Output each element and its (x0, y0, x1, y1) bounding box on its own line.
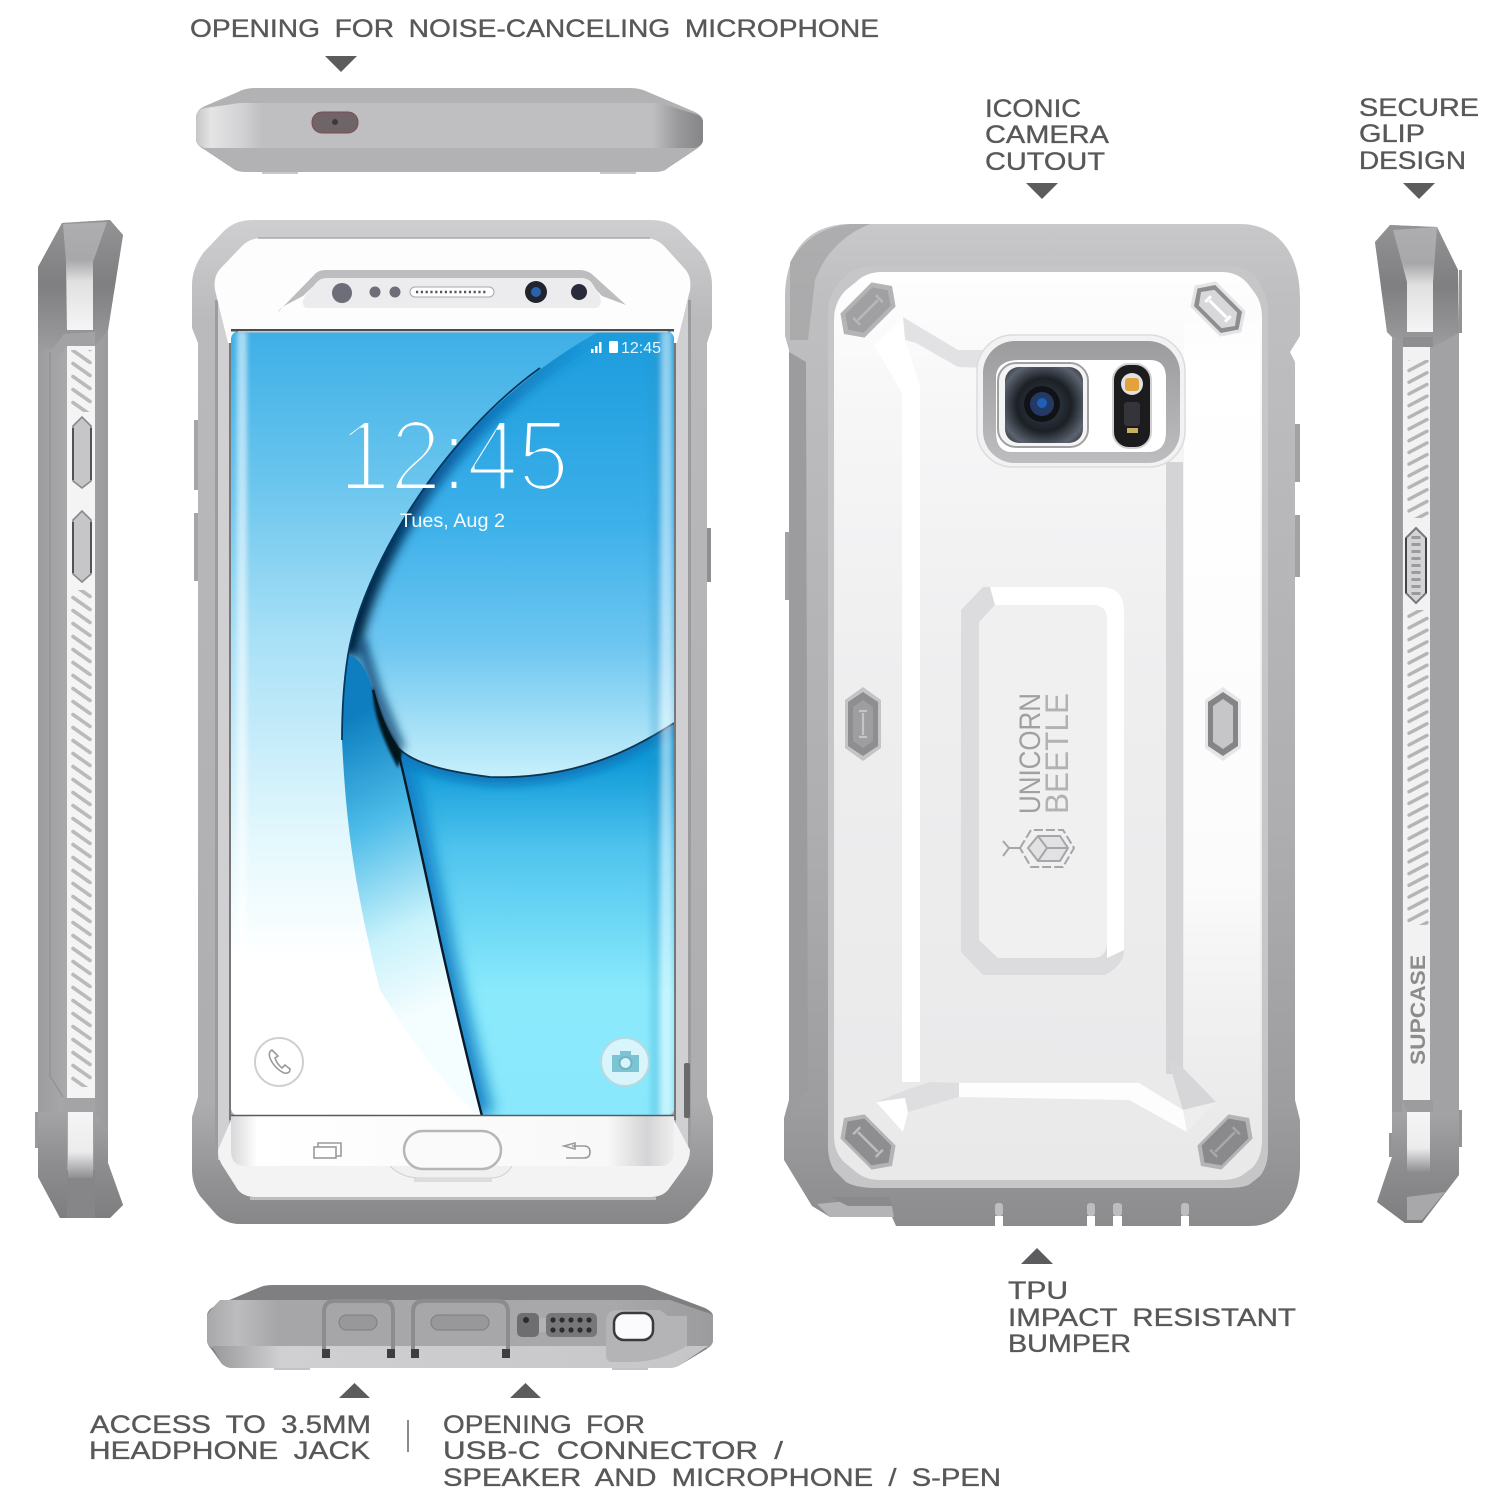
side bumps (1389, 270, 1462, 1157)
bottom edge view of case (207, 1285, 713, 1370)
head highlight (63, 222, 107, 330)
white lid top (215, 238, 690, 343)
icon: beetle logo (1003, 830, 1074, 867)
text: headphone jack label: ACCESS TO 3.5MM (90, 1411, 371, 1439)
arrow: TPU bumper (1021, 1248, 1053, 1264)
text: TPU bumper label: BUMPER (1008, 1330, 1131, 1358)
text: secure grip label (1359, 94, 1479, 175)
clock: 12:45 (339, 400, 569, 512)
hex bumper: top left (832, 274, 904, 346)
camera cutout (977, 335, 1185, 467)
right side button (706, 528, 711, 582)
grip button (1406, 528, 1426, 603)
text: TPU bumper label: IMPACT RESISTANT (1008, 1304, 1296, 1332)
arrow: headphone jack (339, 1383, 370, 1398)
arrow: camera cutout (1026, 183, 1058, 199)
screen top edge (231, 329, 674, 332)
side frame bands (215, 300, 691, 1160)
left side view of case (35, 220, 123, 1218)
wallpaper (231, 331, 674, 1116)
side body (1375, 225, 1459, 1223)
text: USB-C, speaker, S-pen label: USB-C CONNECTOR / (443, 1437, 783, 1465)
foot highlight (1407, 1112, 1430, 1172)
white grip strip (67, 346, 95, 1098)
bumper (784, 224, 1300, 1226)
curved screen edge highlights (237, 331, 672, 1116)
hex bumper: left (845, 687, 881, 761)
back key (564, 1143, 590, 1158)
stylus strap (817, 1197, 894, 1217)
ridges: frame embossing (874, 317, 1216, 1132)
text: USB-C, speaker, S-pen label: SPEAKER AND MICROPHONE / S-PEN (443, 1464, 1001, 1492)
white back panel (834, 272, 1262, 1180)
bright right column (1184, 296, 1260, 1136)
head shading (1375, 225, 1459, 347)
status bar: 12:45 (621, 340, 661, 357)
heading: noise-canceling microphone label: OPENING FOR NOISE-CANCELING MICROPHONE (190, 15, 879, 43)
icon: camera (601, 1038, 649, 1086)
arrow: USB-C opening (510, 1383, 541, 1398)
earpiece recess (278, 270, 626, 312)
back view of case (784, 224, 1300, 1227)
text: TPU bumper label: TPU (1008, 1277, 1068, 1305)
head highlight (1393, 227, 1437, 332)
left side buttons (194, 420, 199, 581)
top edge view of case (196, 88, 703, 174)
left dark band (789, 352, 808, 1112)
text: headphone jack label (89, 1411, 371, 1465)
side body (38, 220, 123, 1218)
text: TPU bumper label (1008, 1277, 1296, 1358)
text: camera cutout label: CUTOUT (985, 148, 1105, 176)
brand text: BEETLE (1039, 693, 1075, 814)
belt clip (961, 587, 1124, 975)
panel ring (828, 266, 1268, 1188)
right side view of case (1375, 225, 1462, 1223)
text: secure grip label: DESIGN (1359, 147, 1466, 175)
brand text (1014, 693, 1075, 814)
text: secure grip label: SECURE (1359, 94, 1479, 122)
hex bumper: right (1205, 687, 1241, 761)
white lid bottom (218, 1120, 690, 1197)
home button (404, 1131, 501, 1169)
text: USB-C, speaker, S-pen label (443, 1411, 1001, 1492)
recents key (314, 1143, 341, 1158)
white grip strip (1403, 347, 1430, 1100)
brand text: SUPCASE (1407, 955, 1430, 1065)
lower bumper notches (995, 1216, 1189, 1227)
arrow: microphone (325, 56, 357, 72)
main lens (998, 363, 1088, 447)
foot highlight (68, 1112, 93, 1178)
side buttons (785, 424, 1300, 600)
microphone and speaker grill (517, 1313, 597, 1337)
front view of phone in case (192, 220, 713, 1224)
volume buttons (73, 417, 91, 582)
USB-C opening (411, 1301, 510, 1358)
status bar (591, 340, 661, 357)
hex bumper: top right (1182, 273, 1254, 345)
right side slit (684, 1063, 690, 1118)
hex bumper: bottom right (1189, 1106, 1261, 1178)
icon: phone (255, 1038, 303, 1086)
outer bumper (192, 220, 713, 1224)
head shading (38, 220, 123, 350)
headphone jack opening (322, 1301, 395, 1358)
left band shading (1392, 340, 1402, 1160)
sensor bar (303, 278, 601, 308)
lower bezel with nav keys (231, 1116, 674, 1182)
brand text: UNICORN (1014, 693, 1047, 814)
date: Tues, Aug 2 (400, 511, 505, 532)
text: camera cutout label: CAMERA (985, 121, 1109, 149)
foot shading (38, 1112, 67, 1218)
arrow: secure grip (1403, 183, 1435, 199)
hex bumper: bottom left (832, 1106, 904, 1178)
foot shading (1377, 1112, 1459, 1223)
flash and sensors (1113, 364, 1151, 448)
text: camera cutout label: ICONIC (985, 95, 1081, 123)
S-pen opening (606, 1310, 687, 1362)
microphone opening (312, 112, 358, 133)
text: camera cutout label (985, 95, 1109, 176)
text: USB-C, speaker, S-pen label: OPENING FOR (443, 1411, 645, 1439)
side button bump (35, 1112, 38, 1148)
text: secure grip label: GLIP (1359, 120, 1425, 148)
text: headphone jack label: HEADPHONE JACK (89, 1437, 370, 1465)
lock screen (231, 331, 674, 1116)
